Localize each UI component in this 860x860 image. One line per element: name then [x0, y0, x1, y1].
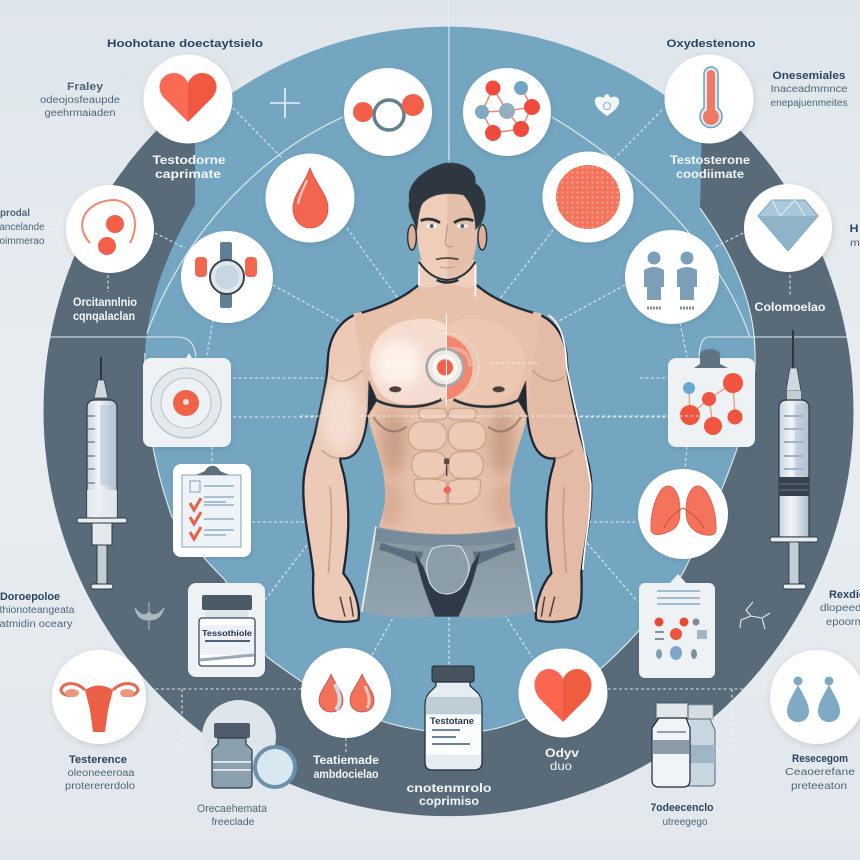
icon: orbit circle [66, 185, 154, 273]
text: magnifier label: freeclade [212, 817, 255, 828]
neck [419, 260, 475, 288]
pecs [370, 319, 446, 404]
text: white label upper right: coodiimate [676, 169, 744, 181]
shorts [362, 527, 535, 618]
text: white label drops: ambdocielao [314, 769, 378, 781]
text: uterus label [65, 754, 135, 792]
text: vial label: 7odeecenclo [650, 802, 714, 814]
text: uterus label: proterererdolo [65, 781, 135, 792]
pec underline shadow [373, 398, 522, 407]
icon: big medicine bottle [425, 666, 482, 770]
text: lower right block: dlopeedi [820, 603, 860, 614]
text: vial label [650, 802, 714, 828]
text: lower right block [820, 589, 860, 628]
text: white label left: Orcitannlnio [73, 297, 137, 309]
panel: medicine jar [188, 583, 265, 677]
text: top right block [770, 70, 848, 109]
icon: small heart badge [595, 94, 619, 116]
icon: plus [270, 88, 300, 118]
figure: man [303, 163, 591, 622]
icon: caduceus [135, 602, 164, 630]
text: top right block: Inaceadmmnce [770, 84, 848, 95]
right arm rim light [548, 315, 591, 570]
hand detail [340, 597, 555, 617]
text: blue drops label [785, 753, 856, 792]
text: white label right: Colomoelao [754, 302, 826, 314]
icon: lungs circle [638, 469, 728, 559]
text: white label upper left: caprimate [155, 169, 221, 181]
torso soft shading [377, 410, 518, 527]
icon: heart circle [144, 54, 232, 144]
text: top left block [40, 81, 120, 119]
nose and mouth [436, 225, 458, 268]
dark outer ring [44, 130, 854, 816]
center line [445, 313, 448, 407]
text: top right block: enepajuenmeites [770, 98, 848, 109]
text: vial label: utreegego [662, 817, 708, 828]
icon: heart circle bottom [518, 648, 608, 738]
eyes and brows [421, 219, 473, 228]
text: white label heart: duo [550, 761, 572, 773]
icon: blood drop circle [266, 154, 354, 242]
icon: ring with atoms [344, 68, 432, 156]
heading: top right: Oxydestenono [666, 38, 756, 50]
face [416, 192, 478, 278]
icon: molecule sketch [740, 602, 770, 629]
text: magnifier label: Orecaehemata [197, 803, 268, 815]
text: white label heart: Odyv [545, 748, 580, 760]
icon: watch circle [181, 231, 273, 323]
neck shadow [437, 280, 458, 282]
icon: two people circle [625, 230, 719, 324]
armpit shadows [367, 380, 527, 417]
nipples [389, 386, 505, 392]
icon: thermometer circle [664, 54, 754, 144]
trapezius outline [362, 285, 533, 313]
heading: top left: Hoohotane doectaytsielo [107, 38, 263, 50]
icon: diamond circle [744, 184, 832, 272]
icon: two red drops circle [301, 648, 391, 738]
icon: jar with magnifier [202, 700, 295, 788]
side shadows [373, 417, 521, 431]
text: top right block: Onesemiales [772, 70, 846, 82]
text: white label upper left: Testodorne [152, 155, 226, 167]
text: white label drops [313, 755, 379, 781]
text: left edge block: oimmerao [0, 236, 45, 247]
chest emblem [412, 333, 479, 400]
light-blue central disc [145, 27, 755, 733]
arm muscle shading [322, 363, 573, 573]
text: right edge fragment: H [850, 223, 859, 235]
text: blue drops label: Resecegom [792, 753, 848, 765]
text: white label upper left [152, 155, 226, 181]
text: white label center: coprimiso [419, 796, 479, 808]
arm highlight [322, 380, 358, 453]
text: lower right block: epoorm [826, 617, 860, 628]
text: left edge block: prodal [0, 208, 30, 219]
hair [409, 163, 486, 232]
text: top left block: Fraley [67, 81, 104, 93]
icon: right syringe [770, 330, 818, 589]
panel: molecule chart [668, 349, 755, 447]
text: blue drops label: preteeaton [791, 781, 847, 792]
text: white label center [406, 783, 492, 808]
panel: target [143, 353, 231, 447]
right arm [518, 313, 591, 622]
text: uterus label: Testerence [69, 754, 127, 766]
navel and belly mark [444, 458, 451, 494]
torso [353, 263, 542, 540]
icon: big medicine bottle: Testotane [430, 716, 474, 727]
panel: lab report [639, 574, 715, 678]
text: right edge fragment [850, 223, 860, 249]
icon: molecule circle [463, 68, 551, 156]
panel: checklist clipboard [173, 464, 251, 557]
text: white label center: cnotenmrolo [406, 783, 492, 795]
icon: uterus circle [52, 650, 146, 744]
text: white label heart [545, 748, 580, 773]
text: white label upper right: Testosterone [670, 155, 750, 167]
text: lower left block: atmidin oceary [0, 619, 72, 630]
panel: medicine jar: Tessothiole [202, 629, 253, 638]
text: lower left block [0, 591, 75, 630]
text: white label upper right [670, 155, 750, 181]
text: left edge block: ancelande [0, 222, 45, 233]
text: white label left: cqnqalaclan [73, 311, 135, 323]
text: white label left [73, 297, 137, 323]
ears [408, 225, 487, 250]
text: top left block: geehrmaiaden [44, 108, 116, 119]
text: lower left block: thionoteangeata [0, 605, 75, 616]
text: magnifier label [197, 803, 268, 828]
icon: left syringe [77, 357, 127, 589]
icon: twin vials [652, 703, 715, 787]
text: top left block: odeojosfeaupde [40, 95, 120, 106]
text: lower left block: Doroepoloe [0, 591, 60, 603]
text: white label drops: Teatiemade [313, 755, 379, 767]
text: blue drops label: Ceaoerefane [785, 767, 856, 778]
abs [408, 408, 486, 504]
text: uterus label: oleoneeeroaa [68, 768, 135, 779]
icon: blue drops circle [770, 650, 860, 744]
left arm [303, 313, 377, 622]
text: left edge block [0, 208, 45, 247]
text: right edge fragment: m [850, 238, 860, 249]
chest dashed overlay [300, 363, 720, 416]
icon: textured disc circle [542, 152, 634, 242]
